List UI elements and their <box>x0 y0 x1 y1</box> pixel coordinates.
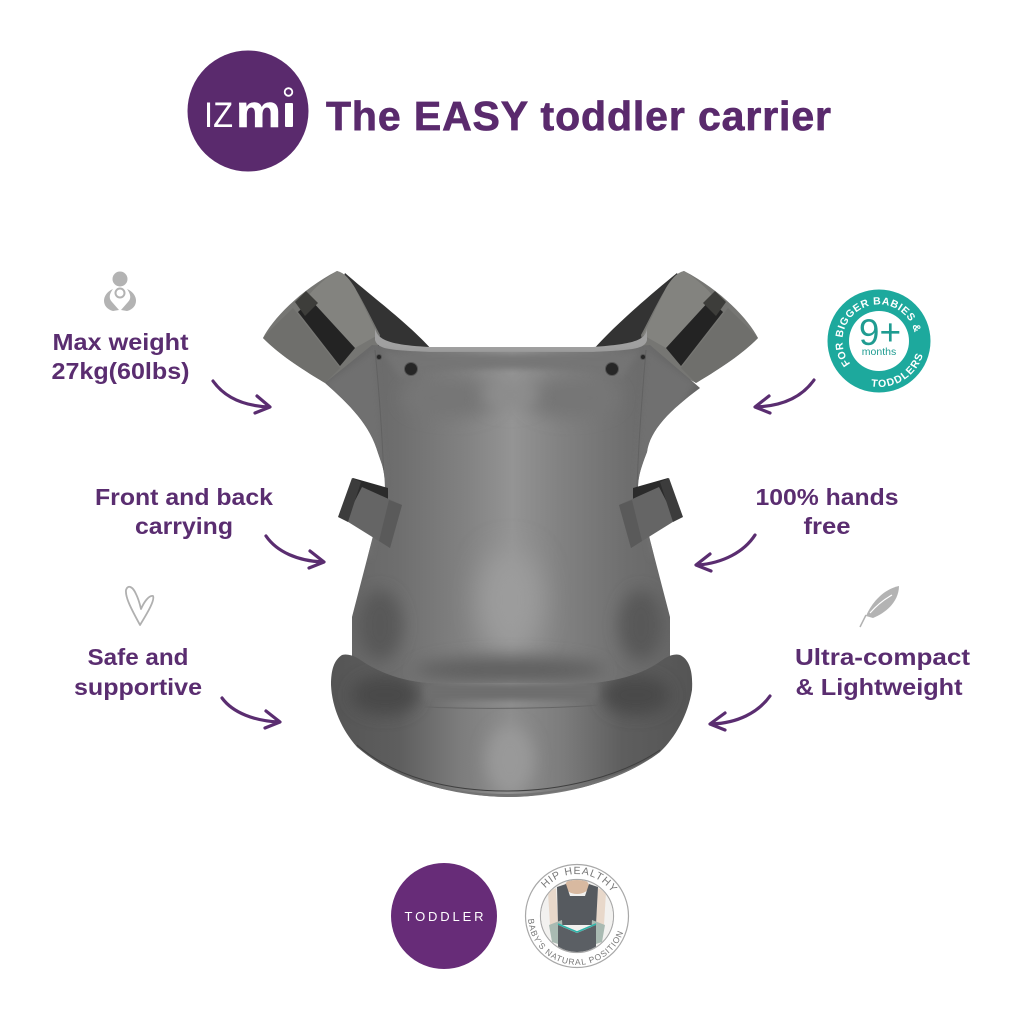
arrow: 9+ months <box>755 380 814 413</box>
badge: hip healthy <box>524 864 630 968</box>
arrow: front and back <box>266 536 324 568</box>
collar <box>375 328 647 352</box>
icon: feather <box>860 586 899 627</box>
feature: hands free: 100% hands <box>756 484 898 510</box>
arrow: safe and supportive <box>222 698 280 728</box>
label text: supportive <box>74 674 202 700</box>
feature: hands free: free <box>804 513 850 539</box>
product: grey baby carrier <box>263 271 758 800</box>
carrier body panel <box>320 340 705 700</box>
badge: for bigger babies and toddlers 9+ months: TODDLERS <box>872 354 922 387</box>
icon: parent and baby <box>104 272 136 311</box>
badge: for bigger babies and toddlers 9+ months: months <box>862 346 896 358</box>
left shoulder strap <box>263 271 380 383</box>
feature: max weight <box>52 272 190 384</box>
icon: heart outline <box>126 587 153 625</box>
feature: ultra-compact and lightweight <box>795 586 970 700</box>
badge: hip healthy: BABY'S NATURAL POSITION <box>528 919 623 965</box>
badge: for bigger babies and toddlers 9+ months <box>828 290 930 392</box>
badge: toddler <box>391 863 497 969</box>
snap buttons <box>376 354 646 376</box>
label text: Ultra-compact <box>795 644 970 670</box>
badge: hip healthy: HIP HEALTHY <box>540 866 618 890</box>
arrow: hands free <box>696 535 755 571</box>
left side buckle strap <box>338 478 402 548</box>
waistband <box>325 650 697 800</box>
label text: Safe and <box>88 644 188 670</box>
label text: & Lightweight <box>796 674 963 700</box>
label text: 27kg(60lbs) <box>52 358 190 384</box>
feature: front and back carrying: carrying <box>135 513 233 539</box>
right shoulder strap <box>641 271 758 383</box>
logo: IZMI circle: IZ <box>204 96 233 135</box>
title: The EASY toddler carrier <box>326 93 831 139</box>
badge: for bigger babies and toddlers 9+ months: FOR BIGGER BABIES & <box>835 297 920 368</box>
badge: toddler: TODDLER <box>404 909 484 924</box>
badge photo <box>540 878 614 954</box>
feature: safe and supportive <box>74 587 202 700</box>
arrow: ultra-compact <box>710 696 770 730</box>
logo: IZMI circle <box>188 50 308 172</box>
feature: front and back carrying: Front and back <box>95 484 273 510</box>
badge: for bigger babies and toddlers 9+ months: 9+ <box>859 312 901 353</box>
label text: Max weight <box>52 329 189 355</box>
shoulder back lining <box>335 273 690 350</box>
logo: IZMI circle: m <box>236 86 281 137</box>
right side buckle strap <box>619 478 683 548</box>
arrow: max weight <box>213 381 270 413</box>
